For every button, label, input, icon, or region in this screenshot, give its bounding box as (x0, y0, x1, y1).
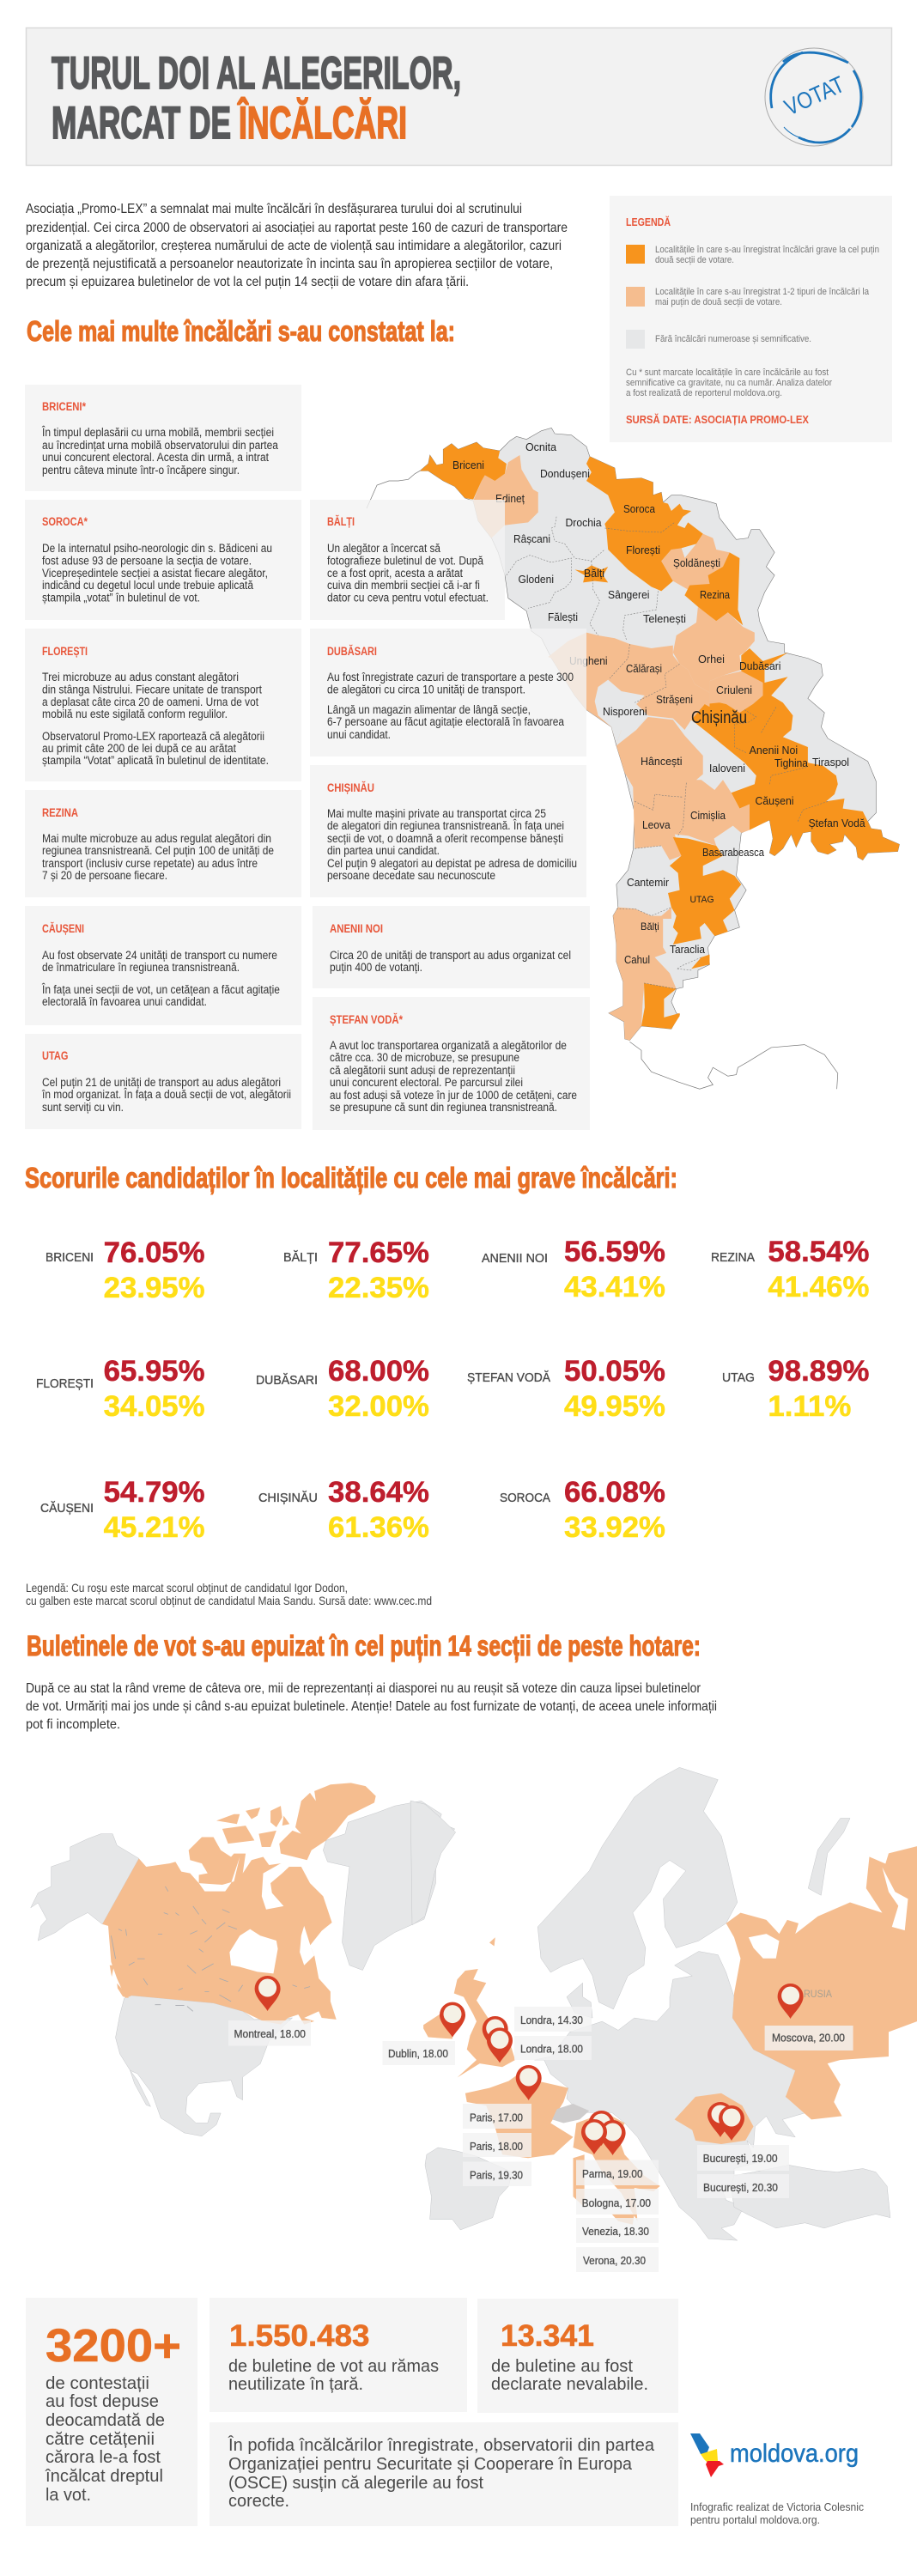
panel: Dubăsari (310, 629, 586, 756)
stat text: cărora le-a fost (46, 2447, 161, 2467)
data source: SURSĂ DATE: ASOCIAȚIA PROMO-LEX (626, 413, 809, 426)
legend text: moderate (655, 287, 870, 307)
pin: Venezia (600, 2120, 626, 2155)
map labels: Cahul (624, 953, 650, 966)
score: Ștefan Vodă: 49.95% (564, 1390, 665, 1423)
card text: A avut loc transportarea organizată a alegătorilor de (330, 1039, 567, 1052)
card text: de înmatriculare în regiunea transnistreană. (42, 961, 240, 974)
pin: Paris (516, 2065, 542, 2100)
legend note (626, 368, 832, 398)
legend note: Cu * sunt marcate localitățile în care încălcările au fost (626, 368, 829, 378)
panel: Utag (25, 1034, 301, 1129)
legend swatch: none (626, 330, 645, 349)
map labels: Călărași (626, 662, 662, 675)
label: Bologna (576, 2189, 659, 2215)
label: Dublin (383, 2041, 455, 2065)
score: Rezina (711, 1236, 869, 1303)
ballots text: După ce au stat la rând vreme de câteva ore, mii de reprezentanți ai diasporei nu au reușit să voteze din cauza lipsei buletinelor (26, 1681, 701, 1696)
card text: de alegători cu circa 10 unități de transport. (327, 683, 525, 696)
map: North America (31, 1783, 455, 2136)
credits: pentru portalul moldova.org. (690, 2513, 820, 2526)
logo: moldova.org: moldova.org (730, 2439, 859, 2468)
stat text: declarate nevalabile. (491, 2374, 648, 2394)
card text: indicând cu degetul locul unde trebuie aplicată (42, 579, 253, 592)
label: Parma (576, 2160, 659, 2185)
title: MARCAT DE (52, 98, 231, 149)
legend text: serious: Localitățile în care s-au înregistrat încălcări grave la cel puțin (655, 245, 879, 255)
label: Londra 18.00 (514, 2036, 592, 2060)
card text (41, 426, 278, 477)
score: Florești: 34.05% (104, 1390, 205, 1423)
card text: se presupune că sunt din regiunea transnistreană. (330, 1101, 557, 1114)
map labels: Telenești (643, 612, 686, 625)
card text: Circa 20 de unități de transport au adus organizat cel (330, 949, 571, 962)
map labels: Strășeni (656, 693, 693, 706)
logo: moldova.org (690, 2433, 859, 2477)
stat text: deocamdată de (46, 2410, 165, 2430)
card text: Mai multe microbuze au adus regulat alegători din (42, 832, 271, 845)
card text: cuiva din membrii secției că i-ar fi (327, 579, 480, 592)
score: Utag (722, 1355, 869, 1423)
card text: Vicepreședintele secției a asistat fiecare alegător, (42, 567, 268, 580)
intro text: organizată a alegătorilor, creșterea numărului de acte de violență sau intimidare a alegătorilor, cazuri (26, 239, 562, 253)
card text: ce a fost oprit, acesta a arătat (327, 567, 463, 580)
score: Soroca: 66.08% (564, 1476, 665, 1509)
map labels: Bălți (641, 920, 659, 933)
map labels: Soroca (623, 502, 656, 515)
label: Dublin: Dublin, 18.00 (388, 2047, 448, 2060)
intro text: de prezență nejustificată a persoanelor neautorizate în incinta sau în apropierea secțiilor de votare, (26, 257, 553, 271)
card text: ștampila “Votat” aplicată în buletinul de identitate. (42, 754, 269, 767)
label: Montreal: Montreal, 18.00 (234, 2027, 306, 2040)
card text: fost aduse 93 de persoane la secția de votare. (42, 555, 252, 567)
card text (41, 1076, 291, 1114)
map labels: Tiraspol (812, 756, 849, 769)
score: Căușeni: 45.21% (104, 1511, 205, 1544)
panel: Căușeni (25, 906, 301, 1025)
card text: a deplasat câte circa 20 de oameni. Urna de vot (42, 696, 258, 708)
card text: au încredințat urna mobilă observatorului din partea (42, 439, 278, 452)
intro text: Asociația „Promo-LEX” a semnalat mai multe încălcări în desfășurarea turului doi al scrutinului (26, 202, 522, 216)
pin: Londra 18.00 (487, 2027, 513, 2063)
card text: electorală în favoarea unui candidat. (42, 995, 207, 1008)
map labels: Cantemir (627, 876, 670, 889)
score: Utag: 1.11% (768, 1390, 851, 1423)
panel: Chișinău (310, 765, 586, 897)
card title: ANENII NOI (330, 922, 383, 935)
score: Utag: UTAG (722, 1370, 755, 1385)
score: Dubăsari: 32.00% (328, 1390, 429, 1423)
panel: Anenii Noi (313, 906, 590, 988)
label: Paris 18.00 (463, 2133, 531, 2157)
map labels: Ialoveni (709, 762, 745, 775)
score: Soroca (500, 1476, 665, 1544)
card text: În timpul deplasării cu urna mobilă, membrii secției (41, 426, 274, 439)
legend text: none: Fără încălcări numeroase și semnificative. (655, 334, 811, 344)
label: Paris 19.30 (463, 2162, 531, 2186)
map labels: Criuleni (716, 683, 752, 696)
label: Montreal (228, 2020, 311, 2045)
stat text: către cetățenii (46, 2429, 155, 2449)
map: Moldova (367, 428, 900, 1089)
title: ÎNCĂLCĂRI (237, 96, 407, 149)
card text: unui candidat. (327, 728, 391, 741)
label: Venezia: Venezia, 18.30 (582, 2225, 649, 2238)
score: Bălți: 77.65% (328, 1236, 429, 1269)
label: Londra 14.30: Londra, 14.30 (520, 2014, 583, 2026)
label: Bologna: Bologna, 17.00 (582, 2196, 651, 2209)
ballots text (26, 1681, 717, 1732)
label: Londra 14.30 (514, 2007, 592, 2032)
pin: București 19.00 (707, 2102, 733, 2137)
score: Rezina: 41.46% (768, 1271, 869, 1303)
panel: Florești (25, 629, 301, 781)
score: Chișinău: 38.64% (328, 1476, 429, 1509)
score: Chișinău (258, 1476, 429, 1544)
panel: Ștefan Vodă (313, 997, 590, 1130)
card text: din partea unui candidat. (327, 844, 440, 857)
card title: SOROCA* (42, 515, 88, 528)
map labels: Fălești (548, 611, 578, 623)
score: Anenii Noi: 56.59% (564, 1236, 665, 1268)
map labels: Taraclia (670, 943, 706, 956)
ballots text: de vot. Urmăriți mai jos unde și când s-au epuizat buletinele. Atenție! Datele au fost furnizate de votanți, de aceea unele informații (26, 1699, 717, 1714)
stat text (228, 2356, 439, 2394)
score: Anenii Noi (482, 1236, 665, 1303)
panel: unused ballots (210, 2298, 467, 2412)
label: Paris 19.30: Paris, 19.30 (470, 2169, 523, 2181)
map: world (31, 1767, 917, 2240)
card text: puțin 400 de votanți. (330, 961, 422, 974)
map labels: Dondușeni (540, 467, 590, 480)
card text (327, 807, 577, 882)
legend text: serious (655, 245, 879, 265)
scores note (26, 1581, 432, 1607)
heading: violations: Cele mai multe încălcări s-au constatat la: (27, 315, 455, 347)
title: TURUL DOI AL ALEGERILOR, (52, 48, 461, 99)
stat text: neutilizate în țară. (228, 2374, 363, 2394)
panel: Briceni (25, 385, 301, 491)
score: Căușeni: 54.79% (104, 1476, 205, 1509)
card text: mobilă nu este sigilată conform regulilor. (42, 708, 228, 720)
map labels: Sângerei (608, 588, 650, 601)
stat text (45, 2373, 165, 2505)
panel: legend (610, 196, 892, 442)
card text: Cel puțin 9 alegatori au depistat pe adresa de domiciliu (327, 857, 577, 870)
map labels: Ocnita (525, 440, 557, 453)
heading: scores: Scorurile candidaților în localitățile cu cele mai grave încălcări: (25, 1162, 677, 1194)
legend text: serious: două secții de votare. (655, 255, 734, 265)
card text: unui concurent electoral. Acesta din urmă, a intrat (42, 451, 269, 464)
card text: Trei microbuze au adus constant alegători (42, 671, 239, 683)
scores grid (36, 1236, 869, 1544)
card text: În fața unei secții de vot, un cetățean a făcut agitație (41, 983, 280, 996)
score: Florești (36, 1355, 205, 1423)
card text: Un alegător a încercat să (327, 542, 440, 555)
stat number: 13.341 (501, 2319, 594, 2353)
stat text: de buletine de vot au rămas (228, 2356, 439, 2376)
label: București 20.30: București, 20.30 (703, 2181, 778, 2194)
score: Căușeni (40, 1476, 205, 1544)
score: Soroca: 33.92% (564, 1511, 665, 1544)
stat text: de buletine au fost (491, 2356, 633, 2376)
pin: Parma (581, 2119, 607, 2154)
card title: BĂLȚI (327, 515, 355, 528)
ballots text: pot fi incomplete. (26, 1717, 120, 1732)
card text: dator cu ceva pentru votul efectuat. (327, 591, 489, 605)
card text (330, 949, 571, 974)
card text (42, 671, 269, 767)
pin: Bologna (589, 2111, 615, 2146)
panel: Bălți (310, 500, 505, 620)
card text: De la internatul psiho-neorologic din s. Bădiceni au (42, 542, 272, 555)
map labels: Hâncești (641, 755, 683, 768)
panel: OSCE statement: (OSCE) susțin că alegerile au fost (228, 2473, 483, 2493)
card text: 7 și 20 de persoane fiecare. (42, 869, 167, 882)
panel: OSCE statement: În pofida încălcărilor înregistrate, observatorii din partea (228, 2435, 655, 2455)
card text: au fost aduși să voteze în jur de 1000 de cetățeni, care (330, 1089, 577, 1102)
map labels: Cimișlia (690, 809, 726, 822)
map labels: Ungheni (569, 654, 608, 667)
card text: Au fost înregistrate cazuri de transportare a peste 300 (327, 671, 574, 683)
score: Soroca: SOROCA (500, 1491, 550, 1505)
panel: OSCE statement: Organizației pentru Securitate și Cooperare în Europa (228, 2454, 633, 2474)
map labels: Rezina (700, 588, 731, 601)
legend note: semnificative ca gravitate, nu ca număr. Analiza datelor (626, 378, 832, 388)
label: București 20.30 (697, 2174, 789, 2198)
card text: de alegatori din regiunea transnistreană. În fața unei (327, 819, 564, 832)
map labels: Edineț (495, 492, 525, 505)
label: Paris 17.00: Paris, 17.00 (470, 2111, 523, 2124)
label: Paris 17.00 (463, 2104, 531, 2129)
map labels: Briceni (452, 459, 484, 471)
map labels: Căușeni (756, 794, 794, 807)
card text: Au fost observate 24 unități de transport cu numere (42, 949, 277, 962)
panel: OSCE statement: corecte. (228, 2491, 289, 2511)
map labels: Anenii Noi (750, 744, 798, 756)
score: Ștefan Vodă (467, 1355, 665, 1423)
card title: ȘTEFAN VODĂ* (330, 1013, 404, 1026)
score: Ștefan Vodă: 50.05% (564, 1355, 665, 1388)
credits: Infografic realizat de Victoria Colesnic (690, 2500, 864, 2513)
map: Europe (410, 1767, 917, 2240)
scores note: cu galben este marcat scorul obținut de candidatul Maia Sandu. Sursă date: www.cec.md (26, 1594, 432, 1607)
panel: Soroca (25, 500, 301, 620)
card title: BRICENI* (42, 400, 87, 413)
card text: unui concurent electoral. Pe parcursul zilei (330, 1076, 523, 1089)
label: Venezia (576, 2218, 659, 2243)
card title: FLOREȘTI (42, 645, 88, 658)
stat number: 1.550.483 (229, 2319, 369, 2353)
score: Bălți (283, 1236, 429, 1304)
score: Dubăsari: DUBĂSARI (256, 1373, 318, 1388)
label: Moscova (765, 2026, 853, 2050)
map labels: Glodeni (519, 573, 554, 586)
card text (41, 949, 280, 1008)
pin: Dublin (440, 2002, 465, 2038)
card title: DUBĂSARI (327, 645, 377, 658)
legend swatch: serious (626, 245, 645, 264)
panel: invalid ballots (477, 2299, 678, 2413)
map labels: Drochia (565, 516, 602, 529)
map labels: UTAG (690, 895, 714, 905)
score: Anenii Noi: ANENII NOI (482, 1251, 548, 1266)
score: Ștefan Vodă: ȘTEFAN VODĂ (467, 1370, 550, 1385)
score: Briceni (46, 1236, 205, 1304)
map labels: Leova (642, 818, 671, 831)
icon: VOTAT stamp (765, 48, 863, 146)
card title: REZINA (42, 806, 78, 819)
stat text: încălcat dreptul (45, 2466, 163, 2486)
stat text (491, 2356, 648, 2394)
scores note: Legendă: Cu roșu este marcat scorul obținut de candidatul Igor Dodon, (26, 1581, 348, 1595)
pin: Londra 14.30 (483, 2016, 508, 2051)
card text (42, 542, 272, 605)
pin: București 20.30 (719, 2105, 744, 2141)
map labels: Ștefan Vodă (809, 817, 865, 829)
card text: Cel puțin 21 de unități de transport au adus alegători (42, 1076, 281, 1089)
panel: Rezina (25, 790, 301, 897)
card text: regiunea transnistreană. Cel puțin 100 de unități de (42, 844, 274, 857)
label: Verona: Verona, 20.30 (583, 2254, 646, 2267)
score: Bălți: BĂLȚI (283, 1250, 318, 1265)
score: Florești: FLOREȘTI (36, 1376, 94, 1391)
stat text: au fost depuse (46, 2391, 159, 2411)
panel: OSCE statement (210, 2422, 678, 2526)
map labels: Dubăsari (739, 659, 781, 672)
intro text: precum și epuizarea buletinelor de vot la cel puțin 14 secții de votare din afara țării. (26, 275, 469, 289)
heading: ballots abroad: Buletinele de vot s-au epuizat în cel puțin 14 secții de peste hotare: (27, 1630, 701, 1662)
card text: către cca. 30 de microbuze, se presupune (330, 1051, 519, 1064)
score: Bălți: 22.35% (328, 1272, 429, 1304)
credits (690, 2500, 864, 2526)
map labels: Șoldănești (673, 556, 720, 569)
legend note: a fost realizată de reporterul moldova.org. (626, 388, 782, 398)
map labels: Râșcani (513, 532, 550, 545)
card text: fotografieze buletinul de vot. După (327, 555, 483, 567)
card text: 6-7 persoane au făcut agitație electorală în favoarea (327, 715, 564, 728)
map labels (452, 440, 865, 966)
label: Londra 18.00: Londra, 18.00 (520, 2042, 583, 2056)
card title: CĂUȘENI (42, 922, 84, 935)
pin: Moscova (778, 1984, 804, 2019)
card text: persoane decedate sau necunoscute (327, 869, 495, 882)
intro text (26, 202, 568, 289)
card text: ștampila „votat” în buletinul de vot. (42, 591, 200, 605)
legend title: LEGENDĂ (626, 216, 671, 228)
card text (327, 671, 574, 741)
score: Briceni: 23.95% (104, 1272, 205, 1304)
card title: CHIȘINĂU (327, 781, 374, 794)
title (52, 48, 461, 149)
intro text: prezidențial. Cei circa 2000 de observatori ai asociației au raportat peste 160 de cazuri de transportare (26, 221, 568, 235)
score: Briceni: 76.05% (104, 1236, 205, 1269)
card text: au primit câte 200 de lei după ce au arătat (42, 742, 236, 755)
map labels: Florești (626, 544, 660, 556)
card text (42, 832, 274, 882)
score: Chișinău: 61.36% (328, 1511, 429, 1544)
stat text: de contestații (46, 2373, 149, 2393)
stat number: 3200+ (46, 2320, 181, 2372)
score: Anenii Noi: 43.41% (564, 1271, 665, 1303)
score: Căușeni: CĂUȘENI (40, 1501, 94, 1516)
score: Rezina: 58.54% (768, 1236, 869, 1268)
legend swatch: moderate (626, 287, 645, 307)
card text: Mai multe mașini private au transportat circa 25 (327, 807, 546, 820)
card text (330, 1039, 577, 1114)
panel: 3200+ complaints (26, 2298, 197, 2526)
legend text: moderate: Localitățile în care s-au înregistrat 1-2 tipuri de încălcări la (655, 287, 870, 297)
card text: sunt serviți cu vin. (42, 1101, 124, 1114)
header panel (26, 27, 891, 165)
icon: VOTAT stamp: VOTAT (780, 71, 848, 120)
card text: transport (inclusiv curse repetate) au adus între (42, 857, 258, 870)
card title: UTAG (42, 1049, 69, 1062)
map labels: Orhei (698, 653, 725, 665)
label: București 19.00 (697, 2145, 789, 2171)
label: Parma: Parma, 19.00 (582, 2167, 642, 2180)
legend text: moderate: mai puțin de două secții de votare. (655, 297, 782, 307)
card text: că alegătorii sunt aduși de reprezentanții (330, 1064, 515, 1077)
label: Paris 18.00: Paris, 18.00 (470, 2140, 523, 2153)
score: Dubăsari: 68.00% (328, 1355, 429, 1388)
card text: Observatorul Promo-LEX raportează că alegătorii (42, 730, 264, 743)
label: Verona (576, 2247, 659, 2272)
score: Dubăsari (256, 1355, 429, 1423)
card text: din stânga Nistrului. Fiecare unitate de transport (42, 683, 262, 696)
stat text: la vot. (46, 2485, 91, 2505)
label: Moscova: Moscova, 20.00 (772, 2032, 845, 2044)
label: Rusia: RUSIA (804, 1988, 832, 2000)
score: Chișinău: CHIȘINĂU (258, 1491, 318, 1505)
card text: secții de vot, o doamnă a oferit recompense bănești (327, 832, 563, 845)
card text: pentru câteva minute într-o încăpere singur. (42, 464, 240, 477)
map labels: Chișinău (691, 708, 747, 727)
score: Rezina: REZINA (711, 1250, 755, 1265)
score: Briceni: BRICENI (46, 1250, 94, 1265)
map labels: Bălți (584, 567, 604, 580)
pin: Montreal (255, 1976, 281, 2011)
card text (327, 542, 489, 605)
map labels: Nisporeni (603, 705, 647, 718)
map labels: Tighina (774, 756, 809, 769)
label: București 19.00: București, 19.00 (703, 2152, 778, 2165)
card text: în mod organizat. În fața a două secții de vot, alegătorii (41, 1088, 291, 1101)
score: Florești: 65.95% (104, 1355, 205, 1388)
card text: Lângă un magazin alimentar de lângă secție, (327, 703, 531, 716)
score: Utag: 98.89% (768, 1355, 869, 1388)
map labels: Basarabeasca (702, 846, 765, 859)
